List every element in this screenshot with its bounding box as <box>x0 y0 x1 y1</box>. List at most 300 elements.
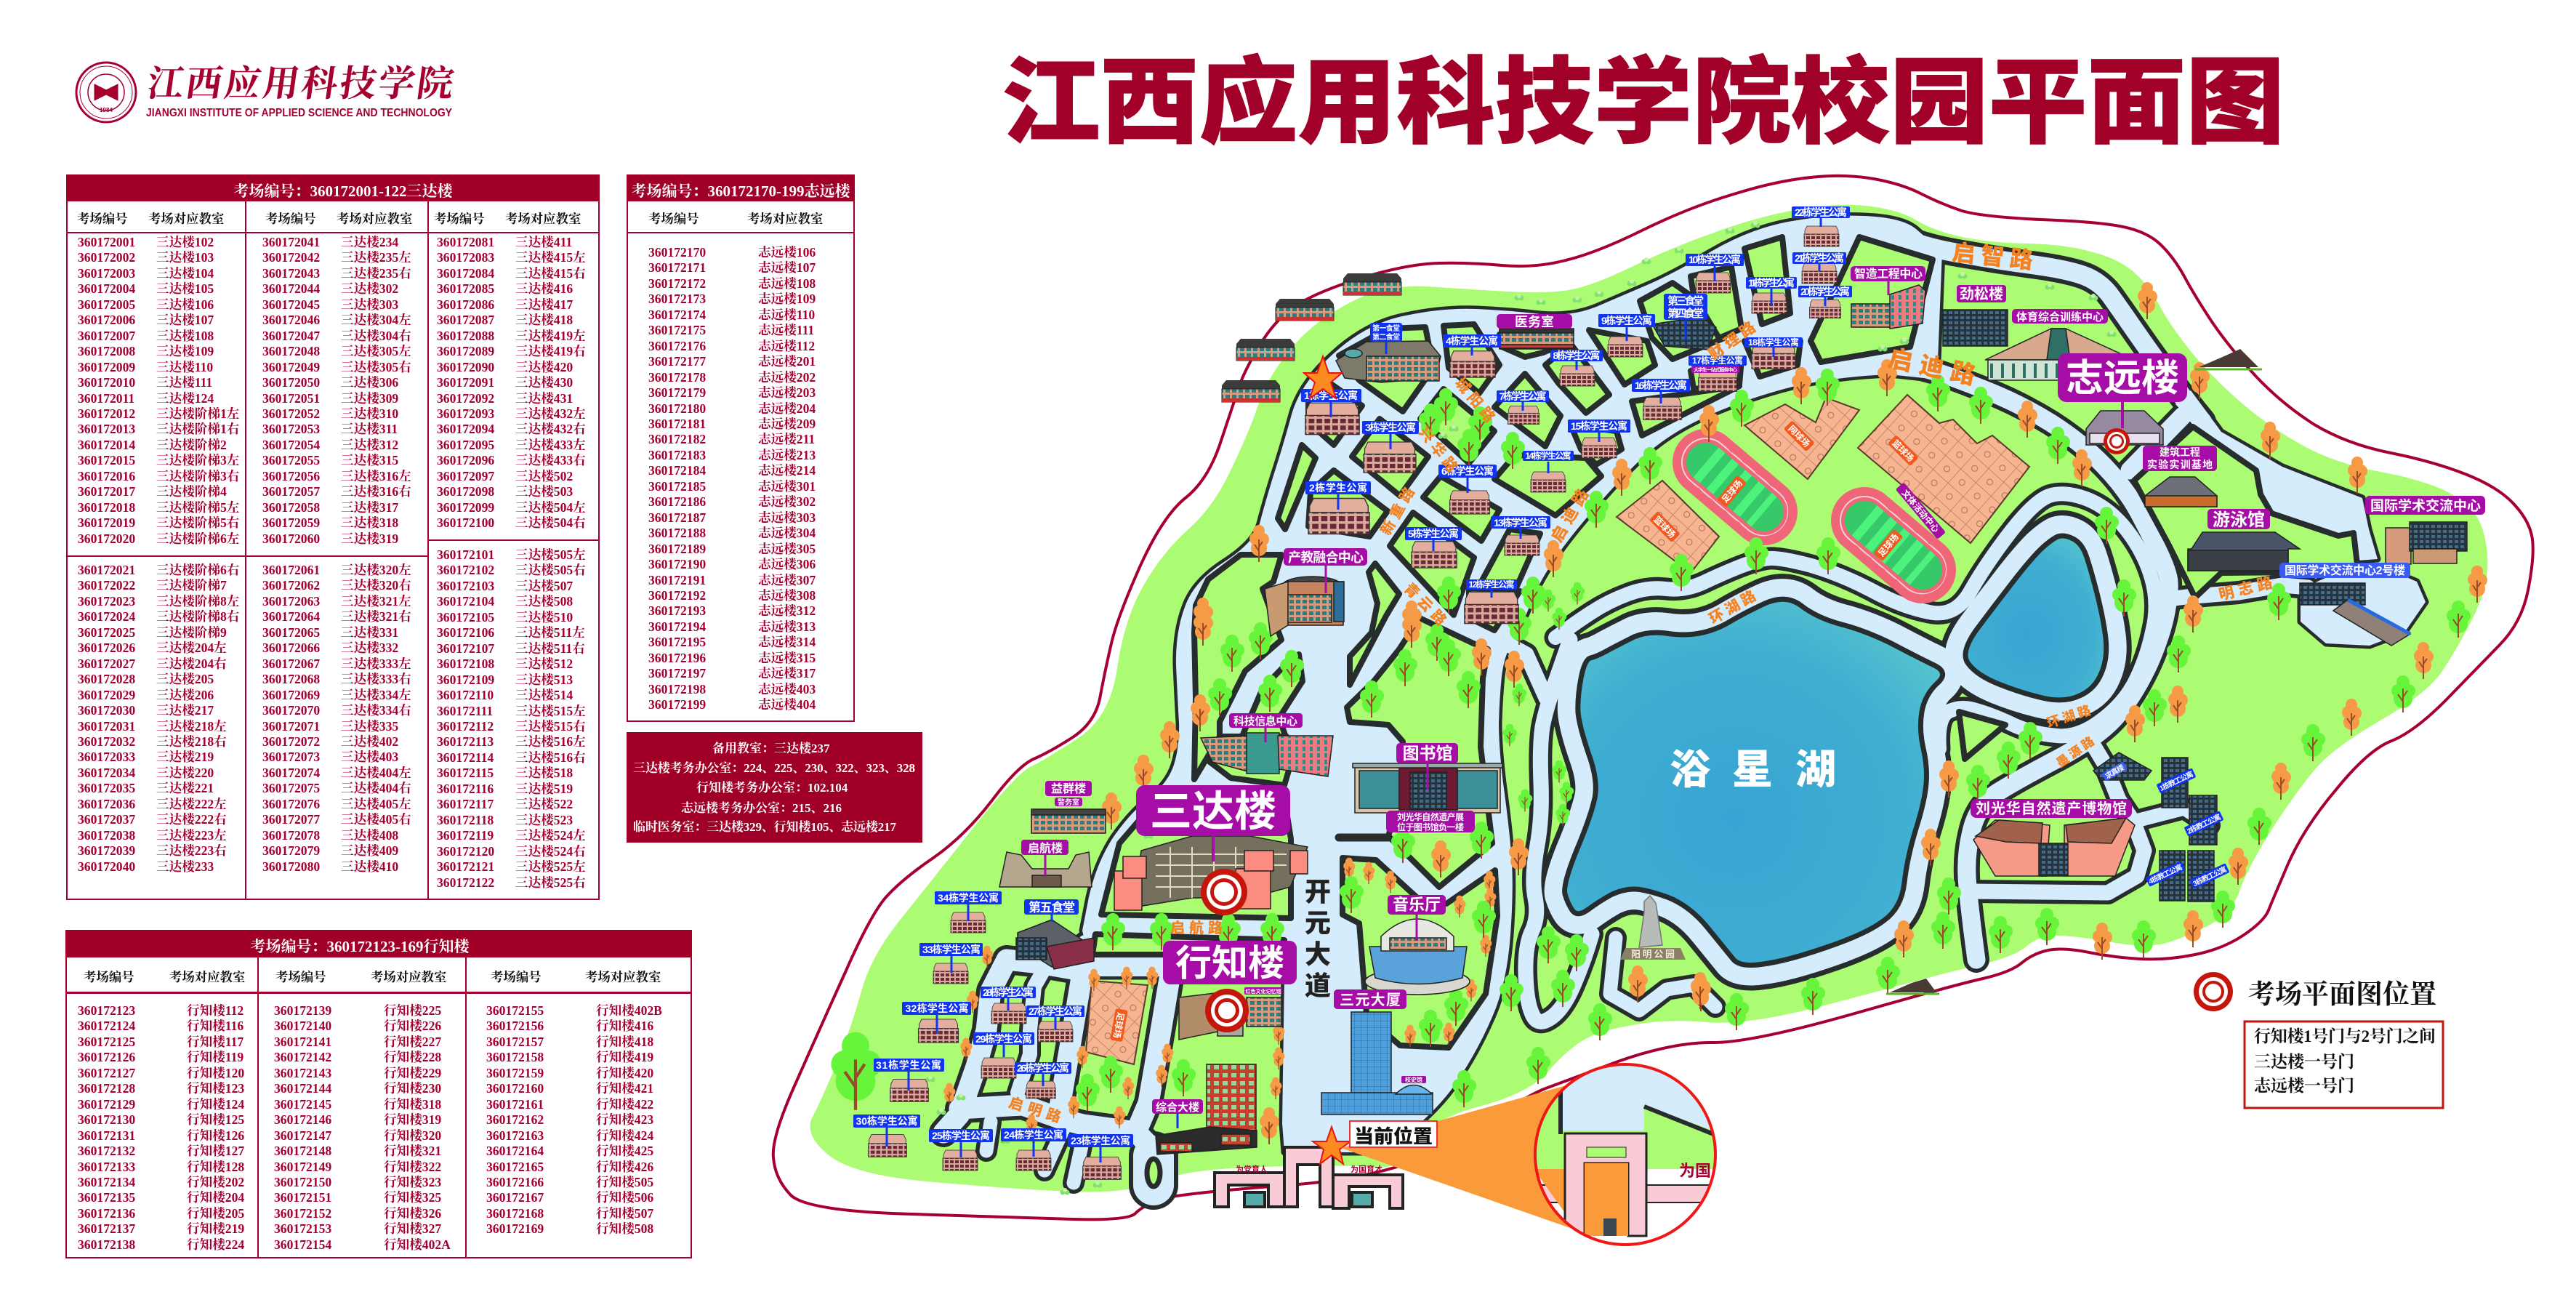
rooms: 041-060: 三达楼235左 <box>341 250 411 265</box>
rooms: 123-138: 行知楼124 <box>187 1097 244 1112</box>
rooms: 101-122: 三达楼510 <box>515 610 573 625</box>
column headers: 考场编号 <box>84 970 134 984</box>
rooms: 170-199: 志远楼201 <box>758 354 816 369</box>
rows: 061-080: 360172064 <box>262 609 320 624</box>
rooms: 021-040: 三达楼222右 <box>156 812 227 827</box>
campus land <box>810 205 2487 1192</box>
rows: 101-122: 360172111 <box>437 704 493 718</box>
rooms: 139-154: 行知楼322 <box>384 1160 441 1174</box>
rows: 170-199: 360172196 <box>648 651 706 665</box>
rows: 170-199: 360172171 <box>648 260 706 275</box>
building: 第三第四食堂 <box>1652 317 1716 350</box>
logo emblem: 1984 <box>100 107 113 113</box>
rows: 061-080: 360172071 <box>262 719 320 734</box>
label: 音乐厅 <box>1388 895 1446 941</box>
rooms: 139-154: 行知楼325 <box>384 1190 441 1205</box>
rows: 061-080: 360172068 <box>262 672 320 686</box>
label: 图书馆 <box>1396 743 1458 790</box>
building: 三元大厦 <box>1321 1012 1433 1115</box>
rooms: 170-199: 志远楼107 <box>758 260 816 275</box>
rooms: 081-100: 三达楼415右 <box>515 266 586 281</box>
rooms: 041-060: 三达楼310 <box>341 406 398 421</box>
panel: 行知楼考场表 <box>65 930 692 1258</box>
rows: 001-020: 360172018 <box>78 500 135 515</box>
rows: 041-060: 360172049 <box>262 360 320 374</box>
rooms: 101-122: 三达楼505右 <box>515 563 586 577</box>
rooms: 081-100: 三达楼419左 <box>515 329 586 343</box>
rows: 001-020: 360172010 <box>78 375 135 390</box>
office information box: 备用教室：三达楼237 <box>712 741 830 755</box>
labels: west dorms: 32栋学生公寓 <box>906 1003 968 1014</box>
rows: 101-122: 360172105 <box>437 610 494 625</box>
building: 教工公寓 towers <box>2160 758 2217 902</box>
building: 博物馆 <box>1973 818 2135 876</box>
rooms: 170-199: 志远楼106 <box>758 245 816 260</box>
rows: 061-080: 360172075 <box>262 781 320 795</box>
rooms: 021-040: 三达楼206 <box>156 688 214 702</box>
rows: 101-122: 360172118 <box>437 813 494 827</box>
column headers: 考场编号 <box>648 212 699 226</box>
road names: 环湖路 <box>2045 702 2096 731</box>
panel: 志远楼考场表 <box>627 174 855 722</box>
road names: 明志路 <box>2217 574 2279 604</box>
rows: 061-080: 360172074 <box>262 766 320 780</box>
rows: 101-122: 360172103 <box>437 579 494 593</box>
labels: west dorms: 29栋学生公寓 <box>975 1033 1032 1045</box>
callout: current location zoom <box>1341 1061 1730 1250</box>
court tags: 网球场 <box>1786 423 1812 449</box>
rows: 170-199: 360172178 <box>648 370 706 385</box>
rows: 061-080: 360172079 <box>262 843 320 858</box>
rooms: 123-138: 行知楼123 <box>187 1081 244 1096</box>
labels: west dorms: 30栋学生公寓 <box>856 1115 917 1127</box>
rooms: 041-060: 三达楼235右 <box>341 266 411 281</box>
labels: staff apartments: 3栋教工公寓 <box>2191 864 2229 888</box>
rooms: 081-100: 三达楼420 <box>515 360 573 374</box>
column headers: 考场编号 <box>275 970 326 984</box>
rooms: 001-020: 三达楼110 <box>156 360 213 374</box>
rooms: 170-199: 志远楼213 <box>758 448 816 462</box>
building: 国际学术交流中心 <box>2386 522 2467 564</box>
rooms: 170-199: 志远楼312 <box>758 603 816 618</box>
rows: 170-199: 360172175 <box>648 323 706 337</box>
table title: 考场编号：360172001-122三达楼 <box>234 182 452 200</box>
rooms: 139-154 <box>384 1003 451 1252</box>
rows: 061-080: 360172065 <box>262 625 320 640</box>
rows: 155-169: 360172159 <box>486 1066 544 1080</box>
label: 警务室 <box>1055 798 1082 807</box>
legend: exam location <box>2194 972 2443 1108</box>
rooms: 170-199: 志远楼314 <box>758 635 816 649</box>
rooms: 081-100: 三达楼418 <box>515 313 573 327</box>
labels: staff apartments: 求真楼 <box>2104 763 2126 781</box>
label: 综合大楼: 综合大楼 <box>1156 1101 1199 1114</box>
rows: 139-154 <box>274 1003 331 1252</box>
rooms: 061-080: 三达楼320右 <box>341 578 411 593</box>
rows: 061-080: 360172063 <box>262 594 320 609</box>
rooms: 081-100 <box>515 235 586 530</box>
zoom circle: 为国 <box>1679 1162 1711 1180</box>
rows: 101-122: 360172116 <box>437 782 494 796</box>
rows: 170-199: 360172176 <box>648 339 706 353</box>
rooms: 041-060: 三达楼303 <box>341 297 398 312</box>
court tags: 足球场 <box>1111 1011 1127 1039</box>
rooms: 041-060: 三达楼305右 <box>341 360 411 374</box>
labels: north dorms: 10栋学生公寓 <box>1689 254 1741 265</box>
rows: 061-080: 360172067 <box>262 656 320 671</box>
rooms: 001-020: 三达楼阶梯1右 <box>156 422 239 436</box>
rooms: 123-138: 行知楼224 <box>187 1237 244 1252</box>
labels: north dorms: 3栋学生公寓 <box>1365 422 1416 433</box>
rooms: 170-199: 志远楼403 <box>758 682 816 696</box>
labels: north dorms: 大学生一站式服务中心 <box>1694 366 1737 373</box>
rooms: 123-138: 行知楼117 <box>187 1035 243 1049</box>
rooms: 170-199: 志远楼204 <box>758 401 816 416</box>
rooms: 061-080: 三达楼403 <box>341 750 398 764</box>
rooms: 001-020: 三达楼107 <box>156 313 214 327</box>
building: 建筑工程实验实训基地 <box>2145 477 2217 507</box>
rooms: 021-040: 三达楼阶梯9 <box>156 625 227 640</box>
rows: 155-169: 360172167 <box>486 1190 544 1205</box>
rows: 170-199: 360172199 <box>648 697 706 712</box>
rooms: 170-199: 志远楼301 <box>758 479 816 494</box>
buildings <box>999 285 2467 1208</box>
rows: 139-154: 360172151 <box>274 1190 331 1205</box>
label: 三元大厦 <box>1334 989 1406 1009</box>
labels: west dorms: 24栋学生公寓 <box>1004 1129 1063 1141</box>
rows: 021-040: 360172035 <box>78 781 135 795</box>
rooms: 139-154: 行知楼327 <box>384 1221 441 1236</box>
rows: 155-169: 360172164 <box>486 1144 544 1158</box>
table title: 考场编号：360172170-199志远楼 <box>631 182 850 200</box>
rooms: 041-060: 三达楼316左 <box>341 469 411 483</box>
labels: north dorms: 13栋学生公寓 <box>1494 517 1547 529</box>
rows: 123-138: 360172128 <box>78 1081 135 1096</box>
labels: north dorms: 20栋学生公寓 <box>1800 286 1850 297</box>
rows: 101-122: 360172104 <box>437 594 494 609</box>
court tags: 足球场 <box>1875 531 1901 558</box>
labels: north dorms: 第二食堂 <box>1372 332 1400 342</box>
rows: 021-040: 360172027 <box>78 656 135 671</box>
rows: 001-020: 360172003 <box>78 266 135 281</box>
rows: 021-040: 360172024 <box>78 609 135 624</box>
large tree <box>831 1032 882 1110</box>
rows: 170-199: 360172185 <box>648 479 706 494</box>
rows: 101-122: 360172106 <box>437 625 494 640</box>
building: 综合大楼 <box>1156 1064 1257 1155</box>
rooms: 081-100: 三达楼433左 <box>515 438 586 452</box>
rooms: 061-080: 三达楼335 <box>341 719 398 734</box>
rows: 170-199: 360172183 <box>648 448 706 462</box>
rooms: 101-122 <box>515 547 586 890</box>
rows: 139-154: 360172152 <box>274 1206 331 1221</box>
rooms: 155-169: 行知楼418 <box>596 1035 653 1049</box>
labels: north dorms: 15栋学生公寓 <box>1571 420 1627 432</box>
label: 三达楼 <box>1136 785 1290 862</box>
rooms: 081-100: 三达楼504左 <box>515 500 586 515</box>
rows: 081-100: 360172094 <box>437 422 494 436</box>
rows: 061-080: 360172069 <box>262 688 320 702</box>
rooms: 101-122: 三达楼511左 <box>515 625 585 640</box>
rows: 170-199: 360172170 <box>648 245 706 260</box>
road edges <box>943 216 2426 1185</box>
small bushes <box>926 221 2117 1195</box>
rows: 081-100: 360172097 <box>437 469 494 483</box>
rows: 081-100: 360172090 <box>437 360 494 374</box>
label: 志远楼: 志远楼 <box>2066 358 2179 400</box>
rooms: 021-040: 三达楼217 <box>156 703 214 718</box>
rows: 061-080: 360172077 <box>262 812 320 827</box>
rows: 123-138: 360172130 <box>78 1112 135 1127</box>
rooms: 081-100: 三达楼415左 <box>515 250 586 265</box>
rows: 101-122: 360172112 <box>437 719 494 734</box>
labels: west dorms: 27栋学生公寓 <box>1029 1005 1082 1017</box>
logo chinese name: 江西应用科技学院 <box>145 63 456 104</box>
rooms: 081-100: 三达楼432左 <box>515 406 586 421</box>
rows: 170-199: 360172180 <box>648 401 706 416</box>
rows: 155-169: 360172158 <box>486 1050 544 1064</box>
rooms: 041-060: 三达楼309 <box>341 391 398 406</box>
rooms: 155-169: 行知楼420 <box>596 1066 653 1080</box>
rows: 170-199: 360172179 <box>648 385 706 400</box>
labels: staff apartments: 2栋教工公寓 <box>2186 812 2223 836</box>
rows: 041-060: 360172053 <box>262 422 320 436</box>
rooms: 021-040: 三达楼219 <box>156 750 214 764</box>
rows: 041-060: 360172044 <box>262 281 320 296</box>
office information box: 行知楼考务办公室：102.104 <box>696 780 848 795</box>
rows: 041-060: 360172048 <box>262 344 320 358</box>
rows: 021-040: 360172033 <box>78 750 135 764</box>
lake name: 星 <box>1732 747 1773 792</box>
labels: north dorms: 14栋学生公寓 <box>1525 450 1571 461</box>
rooms: 170-199: 志远楼202 <box>758 370 816 385</box>
callout wedge <box>1341 1085 1616 1244</box>
running track 2 <box>1864 521 1923 570</box>
label: 建筑工程实验实训基地 <box>2143 446 2217 471</box>
rooms: 101-122: 三达楼505左 <box>515 547 586 562</box>
rows: 081-100: 360172096 <box>437 453 494 467</box>
label: 志远楼 <box>2058 353 2187 428</box>
marker: 行知楼 <box>1205 989 1249 1032</box>
legend box <box>2245 1021 2443 1108</box>
gate slogans: 为党育人 <box>1236 1164 1268 1174</box>
upper lake <box>1965 536 2106 700</box>
label: 科技信息中心: 科技信息中心 <box>1233 715 1297 728</box>
rooms: 101-122: 三达楼524右 <box>515 844 586 859</box>
rows: 155-169: 360172165 <box>486 1160 544 1174</box>
rows: 170-199: 360172172 <box>648 276 706 291</box>
rows: 155-169: 360172162 <box>486 1112 544 1127</box>
labels: north dorms: 第一食堂 <box>1372 324 1400 333</box>
rooms: 155-169: 行知楼422 <box>596 1097 653 1112</box>
label: 体育综合训练中心: 体育综合训练中心 <box>2016 310 2104 324</box>
rooms: 123-138: 行知楼205 <box>187 1206 244 1221</box>
labels: north dorms: 12栋学生公寓 <box>1468 579 1515 590</box>
rooms: 041-060: 三达楼306 <box>341 375 398 390</box>
lake <box>1565 536 2106 965</box>
rooms: 123-138: 行知楼204 <box>187 1190 244 1205</box>
rooms: 101-122: 三达楼516右 <box>515 750 586 765</box>
labels: north dorms: 5栋学生公寓 <box>1408 528 1459 539</box>
rooms: 101-122: 三达楼516左 <box>515 734 586 749</box>
rooms: 170-199: 志远楼112 <box>758 339 815 353</box>
rows: 081-100: 360172100 <box>437 515 494 530</box>
rooms: 061-080: 三达楼405右 <box>341 812 411 827</box>
rows: 139-154: 360172142 <box>274 1050 331 1064</box>
label: 阳明公园: 阳明公园 <box>1631 949 1675 960</box>
rows: 041-060: 360172045 <box>262 297 320 312</box>
orange trees <box>943 282 2487 1144</box>
rows: 123-138: 360172134 <box>78 1175 135 1189</box>
label: 智造工程中心: 智造工程中心 <box>1854 267 1923 281</box>
rows: 001-020: 360172019 <box>78 515 135 530</box>
rooms: 021-040: 三达楼阶梯8左 <box>156 594 239 609</box>
rows: 155-169: 360172155 <box>486 1003 544 1018</box>
rows: 170-199: 360172189 <box>648 542 706 556</box>
rooms: 021-040 <box>156 563 239 874</box>
rooms: 061-080: 三达楼331 <box>341 625 398 640</box>
rooms: 021-040: 三达楼218左 <box>156 719 227 734</box>
rows: 081-100 <box>437 235 494 530</box>
labels: north dorms: 1栋学生公寓 <box>1304 390 1358 401</box>
rows: 123-138: 360172129 <box>78 1097 135 1112</box>
court tags: 文体活动中心 <box>1899 487 1941 534</box>
rooms: 170-199: 志远楼109 <box>758 292 816 306</box>
building: 游泳馆 <box>2188 532 2300 571</box>
rows: 170-199 <box>648 245 706 712</box>
label: 医务室 <box>1497 314 1572 329</box>
rooms: 061-080: 三达楼404左 <box>341 766 411 780</box>
road names: 财理路 <box>1706 317 1762 363</box>
rooms: 101-122: 三达楼519 <box>515 782 573 796</box>
gate slogans: 为国育才 <box>1351 1164 1382 1174</box>
location markers <box>1201 428 2130 1032</box>
building: 行知楼 <box>1179 992 1281 1040</box>
rooms: 123-138: 行知楼126 <box>187 1128 244 1143</box>
label: 游泳馆: 游泳馆 <box>2213 510 2265 530</box>
label: 刘光华自然遗产展: 位于图书馆负一楼 <box>1397 822 1464 832</box>
rows: 001-020: 360172012 <box>78 406 135 421</box>
statue <box>1639 896 1662 947</box>
label: 行知楼: 行知楼 <box>1175 943 1284 984</box>
mountains <box>1886 349 2262 994</box>
rows: 041-060: 360172058 <box>262 500 320 515</box>
rows: 123-138: 360172135 <box>78 1190 135 1205</box>
building: 智造工程中心 <box>1851 285 1925 329</box>
rooms: 139-154: 行知楼319 <box>384 1112 441 1127</box>
rooms: 170-199: 志远楼317 <box>758 666 816 680</box>
rooms: 001-020: 三达楼108 <box>156 329 214 343</box>
rows: 021-040: 360172026 <box>78 641 135 655</box>
rooms: 001-020: 三达楼阶梯5右 <box>156 515 239 530</box>
rows: 155-169: 360172169 <box>486 1221 544 1236</box>
logo english name: JIANGXI INSTITUTE OF APPLIED SCIENCE AND TECHNOLOGY <box>146 107 452 119</box>
rows: 081-100: 360172091 <box>437 375 494 390</box>
rooms: 123-138: 行知楼219 <box>187 1221 244 1236</box>
rooms: 170-199: 志远楼111 <box>758 323 814 337</box>
rows: 139-154: 360172153 <box>274 1221 331 1236</box>
rooms: 139-154: 行知楼318 <box>384 1097 441 1112</box>
rows: 001-020: 360172004 <box>78 281 135 296</box>
rows: 170-199: 360172174 <box>648 308 706 322</box>
lake name <box>1670 747 1836 792</box>
label: 智造工程中心 <box>1851 266 1925 295</box>
rooms: 021-040: 三达楼204右 <box>156 656 227 671</box>
rows: 021-040: 360172040 <box>78 859 135 874</box>
rooms: 061-080: 三达楼404右 <box>341 781 411 795</box>
rooms: 155-169: 行知楼402B <box>596 1003 662 1018</box>
rooms: 155-169: 行知楼506 <box>596 1190 653 1205</box>
rooms: 001-020: 三达楼109 <box>156 344 214 358</box>
rooms: 155-169: 行知楼424 <box>596 1128 653 1143</box>
rooms: 001-020 <box>156 235 239 546</box>
rows: 081-100: 360172084 <box>437 266 494 281</box>
labels: west dorms <box>853 891 1133 1162</box>
rows: 101-122: 360172114 <box>437 750 494 765</box>
label: 阳明公园 <box>1620 948 1686 960</box>
rows: 170-199: 360172188 <box>648 526 706 540</box>
rooms: 155-169: 行知楼423 <box>596 1112 653 1127</box>
office information box <box>627 732 922 843</box>
rows: 081-100: 360172095 <box>437 438 494 452</box>
rows: 081-100: 360172099 <box>437 500 494 515</box>
zoom circle <box>1534 1063 1717 1246</box>
rooms: 155-169: 行知楼421 <box>596 1081 653 1096</box>
avenue name: 开元大道 <box>1305 877 1331 1000</box>
road stub near library <box>1339 833 1388 842</box>
rooms: 170-199: 志远楼305 <box>758 542 816 556</box>
labels: west dorms: 34栋学生公寓 <box>938 892 999 904</box>
rooms: 061-080: 三达楼409 <box>341 843 398 858</box>
road names: 启迪路 <box>1547 481 1595 545</box>
building: 益群楼 <box>1031 809 1106 833</box>
rooms: 139-154: 行知楼323 <box>384 1175 441 1189</box>
labels: north dorms: 22栋学生公寓 <box>1795 206 1847 218</box>
office information box: 临时医务室：三达楼329、行知楼105、志远楼217 <box>633 819 897 834</box>
current location tag: 当前位置 <box>1354 1125 1433 1147</box>
road names <box>1007 239 2279 1128</box>
rows: 101-122: 360172107 <box>437 641 494 656</box>
rooms: 021-040: 三达楼218右 <box>156 734 227 749</box>
labels: west dorms: 28栋学生公寓 <box>983 987 1034 998</box>
office information box: 三达楼考务办公室：224、225、230、322、323、328 <box>633 760 915 775</box>
rows: 123-138: 360172136 <box>78 1206 135 1221</box>
rooms: 021-040: 三达楼阶梯6右 <box>156 563 239 577</box>
rows: 081-100: 360172092 <box>437 391 494 406</box>
label: 建筑工程实验实训基地: 建筑工程 <box>2160 446 2200 458</box>
rooms: 123-138: 行知楼120 <box>187 1066 244 1080</box>
rooms: 170-199: 志远楼307 <box>758 573 816 587</box>
rows: 101-122: 360172108 <box>437 656 494 671</box>
rooms: 139-154: 行知楼230 <box>384 1081 441 1096</box>
rooms: 021-040: 三达楼204左 <box>156 641 227 655</box>
rows: 041-060: 360172046 <box>262 313 320 327</box>
rooms: 081-100: 三达楼504右 <box>515 515 586 530</box>
rooms: 101-122: 三达楼525右 <box>515 875 586 890</box>
avenue name: 开元大道: 开 <box>1305 877 1331 907</box>
rooms: 041-060: 三达楼311 <box>341 422 398 436</box>
column headers: 考场编号 <box>491 970 542 984</box>
label: 三达楼: 三达楼 <box>1150 788 1276 835</box>
wide road areas <box>1082 216 2426 1152</box>
rooms: 139-154: 行知楼320 <box>384 1128 441 1143</box>
rows: 021-040: 360172037 <box>78 812 135 827</box>
shops along north-west edge <box>1222 273 1401 402</box>
rows: 081-100: 360172093 <box>437 406 494 421</box>
building: 体育综合训练中心 <box>1985 329 2134 380</box>
rows: 041-060 <box>262 235 320 546</box>
rooms: 041-060: 三达楼317 <box>341 500 398 515</box>
